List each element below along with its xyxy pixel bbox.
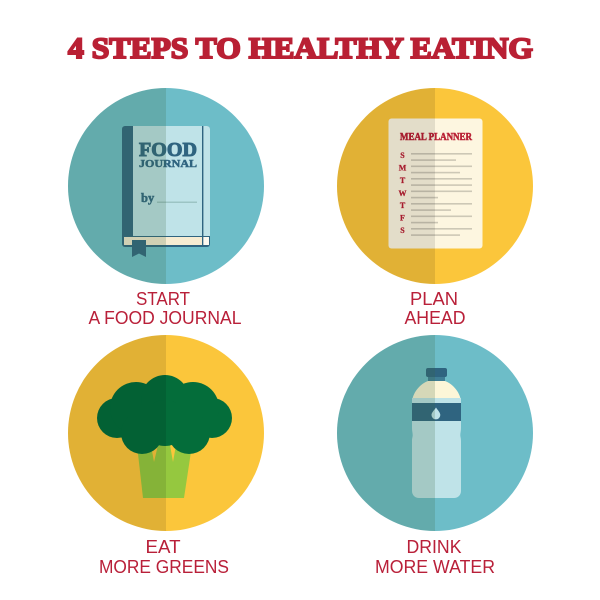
shadow: left half	[337, 88, 435, 284]
icon: food journal book: FOOD	[139, 139, 197, 161]
panel: food journal	[68, 88, 264, 328]
icon: water bottle	[412, 368, 461, 498]
icon: meal planner sheet: S	[400, 151, 405, 160]
label: start a food journal: A FOOD JOURNAL	[88, 308, 242, 328]
label: eat more greens: EAT	[146, 537, 181, 557]
title: 4 STEPS TO HEALTHY EATING	[68, 32, 533, 65]
label: start a food journal	[88, 289, 242, 328]
icon: food journal book: JOURNAL	[139, 159, 197, 170]
panel: eat more greens	[68, 335, 264, 577]
label: eat more greens	[99, 537, 229, 577]
icon: meal planner sheet	[388, 118, 482, 248]
label: start a food journal: START	[136, 289, 190, 309]
circle: yellow	[68, 335, 264, 531]
label: plan ahead	[404, 289, 466, 328]
circle: teal	[337, 335, 533, 531]
shadow: left half	[68, 335, 166, 531]
icon: broccoli	[97, 375, 232, 498]
label: drink more water: DRINK	[406, 537, 462, 557]
circle: yellow	[337, 88, 533, 284]
icon: food journal book: by	[141, 191, 155, 205]
circle: teal	[68, 88, 264, 284]
label: drink more water: MORE WATER	[375, 557, 495, 577]
icon: meal planner sheet: T	[400, 201, 406, 210]
panel: meal planner	[337, 88, 533, 328]
label: eat more greens: MORE GREENS	[99, 557, 229, 577]
label: plan ahead: AHEAD	[404, 308, 466, 328]
icon: meal planner sheet: W	[398, 189, 406, 198]
icon: meal planner sheet: F	[400, 214, 405, 222]
icon: food journal book	[122, 126, 210, 257]
icon: meal planner sheet: T	[400, 176, 406, 185]
shadow: left half	[337, 335, 435, 531]
icon: meal planner sheet: MEAL PLANNER	[400, 132, 473, 143]
shadow: left half	[68, 88, 166, 284]
icon: meal planner sheet: M	[399, 164, 407, 172]
icon: meal planner sheet: S	[400, 226, 405, 235]
label: plan ahead: PLAN	[410, 289, 458, 309]
panel: drink more water	[337, 335, 533, 577]
label: drink more water	[375, 537, 495, 577]
